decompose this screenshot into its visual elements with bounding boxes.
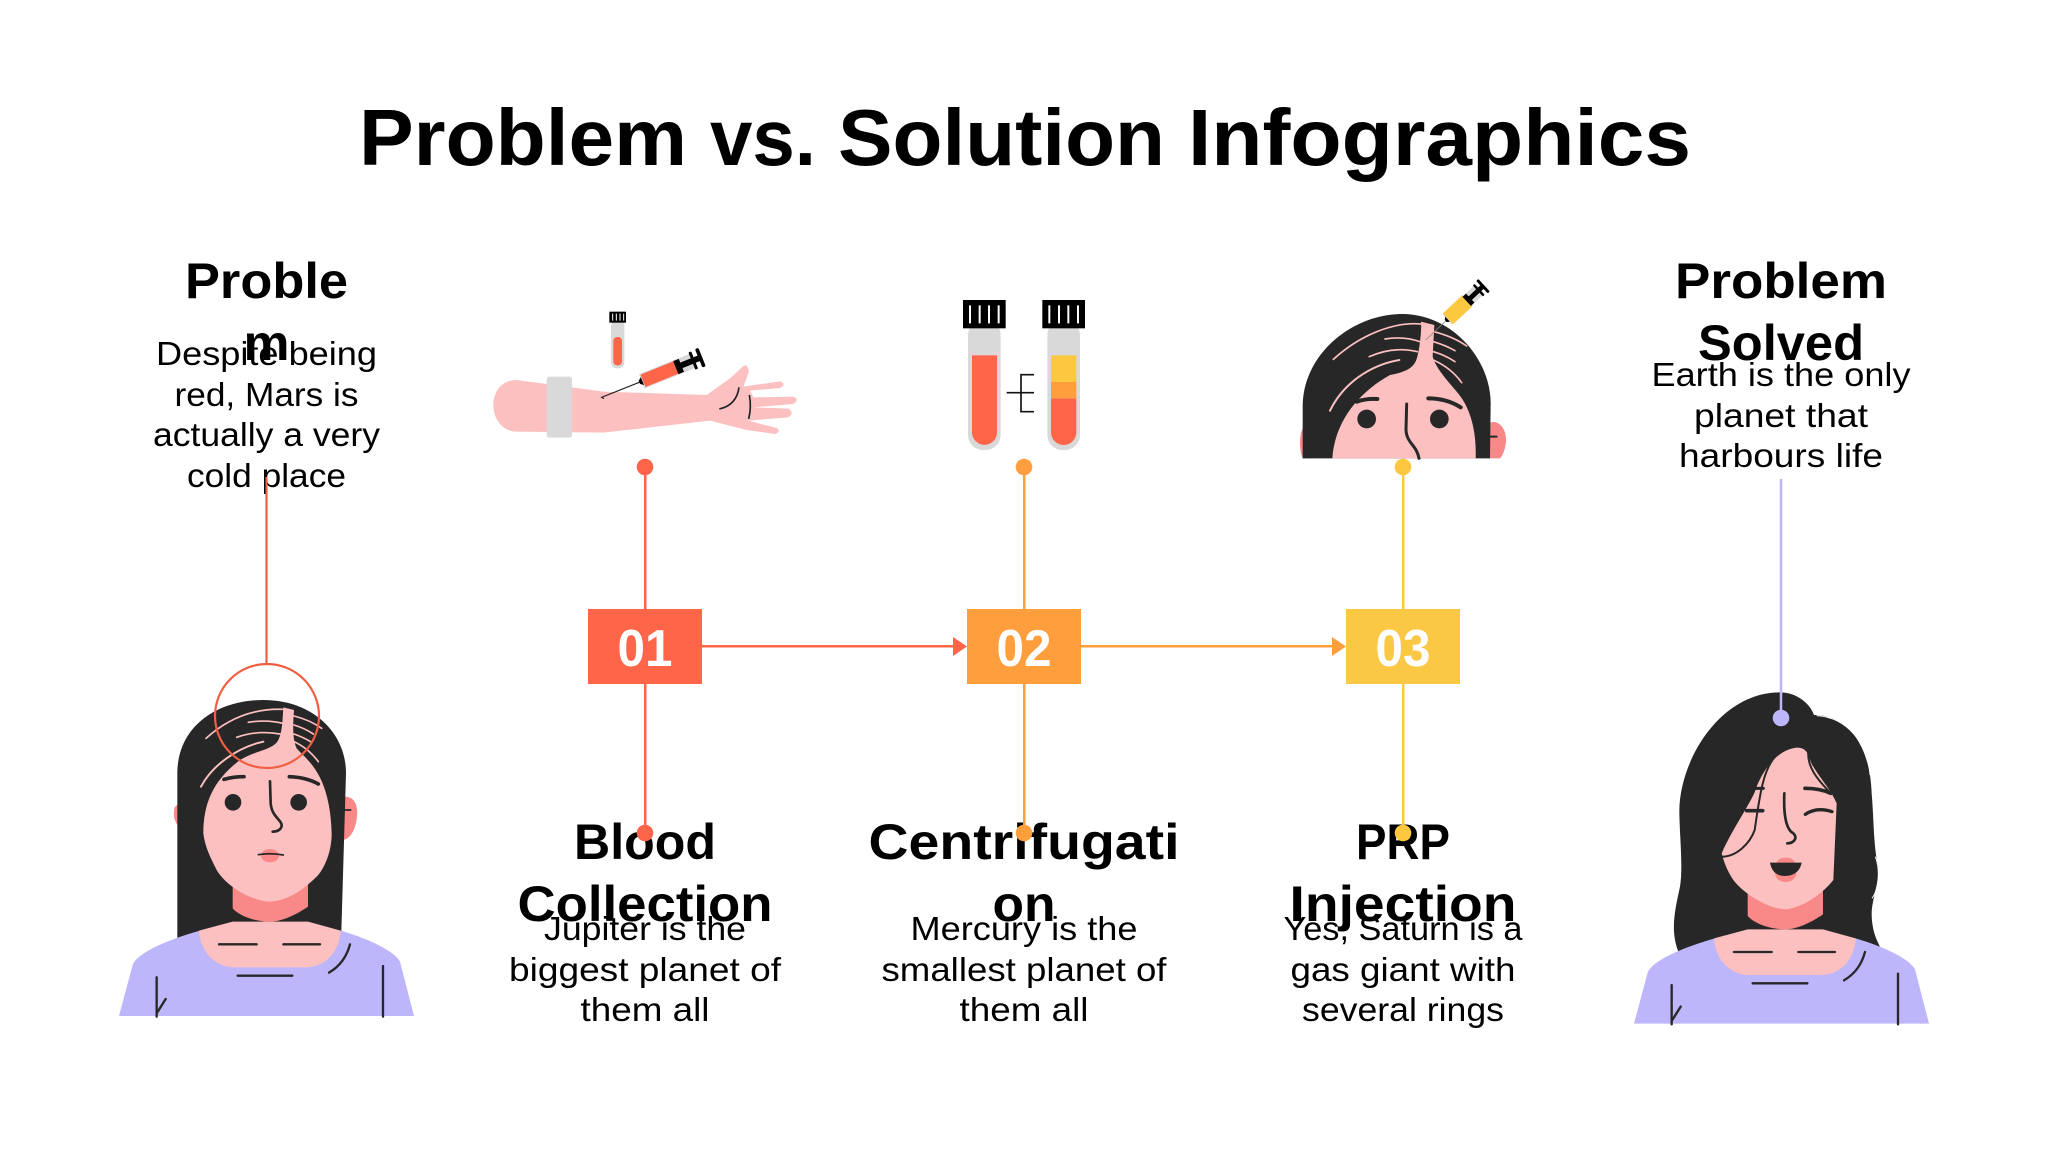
- text block: step 1 blood collection: [509, 814, 782, 1028]
- text block: step 2 centrifugation: smallest planet of: [882, 951, 1167, 988]
- icon: arm with syringe and blood tube: [493, 312, 797, 438]
- title: Infographics: [1188, 93, 1691, 182]
- text block: problem description: Despite being: [156, 335, 377, 372]
- text block: step 2 centrifugation: on: [992, 876, 1056, 932]
- heading: problem: Proble: [185, 253, 348, 309]
- connector line with hair-loss circle: [215, 477, 319, 768]
- heading: problem solved: [1675, 253, 1887, 371]
- text block: solved description: [1652, 356, 1911, 474]
- step badge 02: 02: [996, 620, 1052, 678]
- panel: problem solved: [1634, 253, 1929, 1024]
- step badge 02: [967, 609, 1081, 684]
- step badge 03: [1346, 609, 1460, 684]
- text block: solved description: Earth is the only: [1652, 356, 1911, 393]
- text block: step 3 PRP injection: Yes, Saturn is a: [1284, 910, 1523, 947]
- title: Solution: [838, 93, 1165, 182]
- heading: problem solved: Solved: [1698, 315, 1864, 371]
- text block: step 3 PRP injection: [1284, 814, 1523, 1028]
- text block: problem description: red, Mars is: [174, 376, 358, 413]
- illustration: woman with thinning hair: [119, 700, 414, 1017]
- arrow: step 1 to step 2: [702, 637, 967, 656]
- panel: problem: [119, 253, 414, 1017]
- arrow: step 2 to step 3: [1081, 637, 1346, 656]
- text block: step 2 centrifugation: [868, 814, 1180, 1028]
- text block: problem description: cold place: [187, 457, 346, 494]
- step badge 01: 01: [618, 620, 672, 678]
- icon: centrifuge test tubes: [963, 300, 1085, 450]
- heading: problem: [185, 253, 348, 371]
- text block: step 3 PRP injection: gas giant with: [1290, 951, 1516, 988]
- heading: problem: m: [244, 315, 290, 371]
- text block: step 2 centrifugation: Mercury is the: [910, 910, 1138, 947]
- text block: step 2 centrifugation: Centrifugati: [868, 814, 1180, 870]
- connector: step 1 vertical line with dots: [637, 459, 653, 841]
- text block: step 3 PRP injection: Injection: [1290, 876, 1516, 932]
- heading: problem solved: Problem: [1675, 253, 1887, 309]
- text block: problem description: actually a very: [153, 416, 381, 453]
- text block: solved description: harbours life: [1679, 437, 1883, 474]
- text block: step 1 blood collection: them all: [580, 991, 710, 1028]
- icon: head receiving PRP injection: [1300, 279, 1506, 458]
- illustration: happy woman with full hair: [1634, 692, 1929, 1024]
- text block: problem description: [153, 335, 381, 494]
- text block: step 1 blood collection: biggest planet of: [509, 951, 782, 988]
- text block: solved description: planet that: [1694, 397, 1868, 434]
- text block: step 1 blood collection: Blood: [574, 814, 716, 870]
- step badge 03: 03: [1376, 620, 1430, 678]
- step badge 01: [588, 609, 702, 684]
- text block: step 3 PRP injection: PRP: [1356, 814, 1450, 870]
- connector: step 2 vertical line with dots: [1016, 459, 1032, 841]
- connector: step 3 vertical line with dots: [1395, 459, 1411, 841]
- text block: step 3 PRP injection: several rings: [1302, 991, 1504, 1028]
- title: [359, 93, 1691, 182]
- text block: step 1 blood collection: Jupiter is the: [544, 910, 746, 947]
- text block: step 1 blood collection: Collection: [518, 876, 772, 932]
- text block: step 2 centrifugation: them all: [960, 991, 1088, 1028]
- title: vs.: [710, 93, 816, 182]
- connector line with dot: [1773, 479, 1789, 726]
- title: Problem: [359, 93, 687, 182]
